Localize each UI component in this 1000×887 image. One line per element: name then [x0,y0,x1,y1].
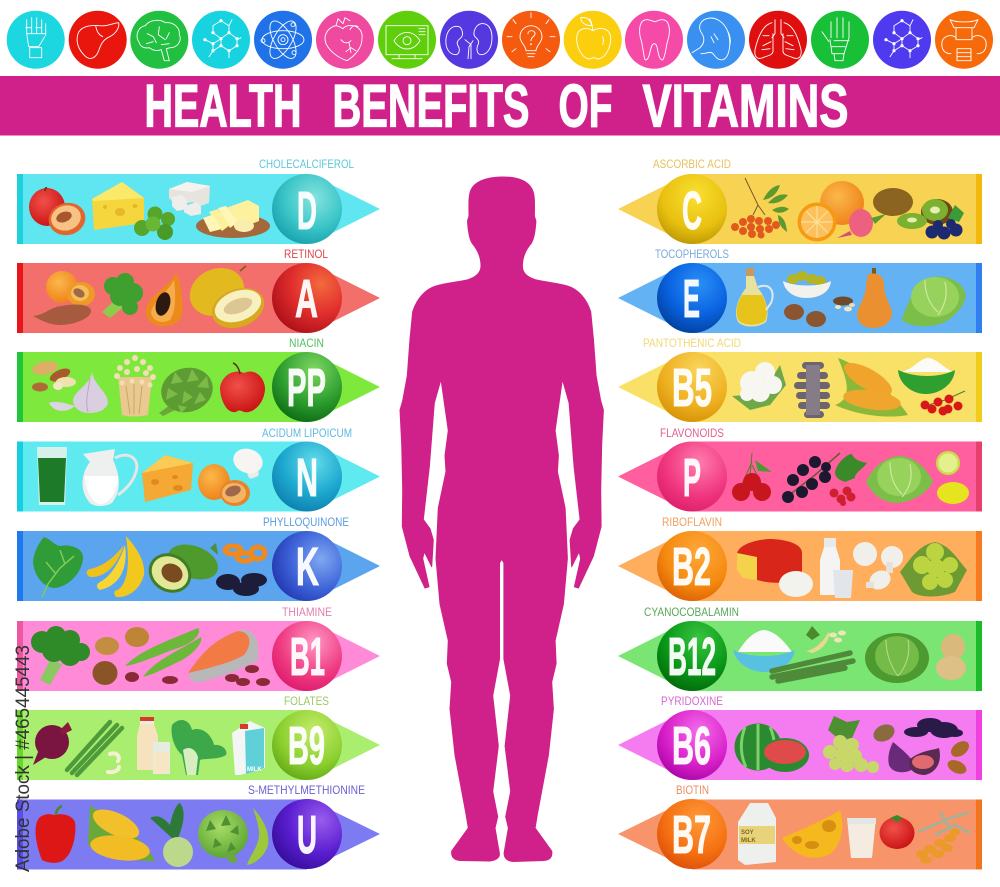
food: green grapes [823,716,879,773]
title: OF [558,72,612,140]
vitamin ball D: D [297,181,317,241]
food: romanesco [900,542,967,596]
food: figs [888,742,940,775]
food: cheese slice [782,810,842,858]
food: melon [182,259,270,335]
food: tomato [880,815,914,849]
title: BENEFITS [332,72,530,140]
panel: vitamin P [618,426,982,512]
ribbon arrow [17,800,380,870]
food: walnuts [92,627,149,685]
food: soy milk carton: SOY [741,830,754,836]
food: oyster mushroom stack [794,362,830,418]
vitamin ball B7 [657,799,727,869]
vitamin ball C [657,174,727,244]
vitamin ball K: K [296,537,319,597]
label: BIOTIN [676,783,709,797]
vitamin ball B7: B7 [672,805,711,865]
title banner [0,72,1000,140]
food: cashews [108,753,119,772]
panel: vitamin K [17,515,380,601]
vitamin ball U [272,799,342,869]
food: flour in green bowl [898,358,955,394]
food: savoy cabbage [865,633,929,683]
ribbon arrow [17,621,380,691]
icon: light bulb with question [502,11,560,69]
food: brussels sprouts [134,206,175,240]
food: butternut squash [857,268,892,328]
food: egg [779,571,813,597]
icon: atom [254,11,312,69]
food: bowl of olives [783,271,831,298]
label: CHOLECALCIFEROL [259,157,354,171]
ribbon arrow [17,174,380,244]
panel: vitamin C [618,157,982,244]
label: RETINOL [284,247,328,261]
food: watermelon [734,724,809,772]
label: RIBOFLAVIN [662,515,722,529]
icon: kidneys [440,11,498,69]
food: beans with leaf [806,626,846,653]
vitamin ball B9: B9 [288,716,325,776]
title: HEALTH [144,72,302,140]
icon: hand skeleton [811,11,869,69]
vitamin ball C: C [682,181,702,241]
food: milk bottle and glass [820,538,853,598]
vitamin ball D [272,174,342,244]
food: asparagus [772,653,853,681]
label: FLAVONOIDS [660,426,724,440]
vitamin ball PP [272,352,342,422]
food: glass of green juice [37,447,67,505]
food: brown nut [871,721,897,745]
food: radish [837,209,886,238]
food: leaves [835,454,867,482]
food: bok choy [171,720,226,775]
food: rowan berries [731,178,789,238]
icon: molecule [192,11,250,69]
label: ACIDUM LIPOICUM [262,426,352,440]
food: cauliflower [732,362,786,410]
ribbon arrow [618,621,982,691]
label: PYRIDOXINE [661,694,723,708]
food: butter on plate [196,200,270,238]
vitamin ball B1 [272,621,342,691]
food: soy milk carton: MILK [741,838,756,844]
food: asparagus [67,722,122,775]
food: prunes [216,573,267,596]
food: cottage cheese in bowl [733,630,795,672]
vitamin ball K [272,531,342,601]
vitamin ball A: A [295,269,318,329]
human silhouette [400,177,603,862]
food: cheese wheel [737,539,802,583]
vitamin ball B12: B12 [668,627,716,687]
food: artichoke [156,362,218,418]
food: apricots [198,464,250,506]
icon: eye scan monitor [378,11,436,69]
food: glass of milk [847,818,876,858]
panel: vitamin A [17,247,380,335]
icon: foot bones [7,11,65,69]
ribbon arrow [618,263,982,333]
ribbon arrow [17,352,380,422]
food: apricot [46,271,95,306]
icon: tooth [625,11,683,69]
food: dried apricots [225,546,265,561]
icon row [7,11,993,69]
title [144,72,848,140]
food: red currants [920,391,965,416]
ribbon arrow [17,710,380,780]
food: broccoli [31,626,90,685]
food: green pods [125,628,201,677]
ribbon arrow [17,442,380,512]
food: soybean pod [247,808,268,865]
panel: vitamin D [17,157,380,244]
panel: vitamin N [17,426,380,512]
food: soy milk carton [738,803,776,865]
ribbon arrow [618,531,982,601]
icon: lungs [749,11,807,69]
label: FOLATES [284,694,329,708]
food: tofu blocks [169,182,210,216]
icon: spleen [687,11,745,69]
panel: vitamin B7 [618,783,982,870]
panel: vitamin B2 [618,515,982,601]
ribbon arrow [618,800,982,870]
food: papaya [146,273,183,326]
vitamin ball N [272,442,342,512]
food: red apple [220,363,265,412]
food: corn cobs [88,803,155,864]
vitamin ball PP: PP [287,358,326,418]
label: S-METHYLMETHIONINE [248,783,365,797]
ribbon arrow [17,263,380,333]
vitamin ball B6 [657,710,727,780]
food: sweet potato [33,305,91,325]
panel: vitamin E [618,247,982,333]
vitamin ball B5: B5 [672,358,712,418]
food: mushroom [230,445,266,479]
icon: liver [69,11,127,69]
ribbon arrow [618,352,982,422]
label: PANTOTHENIC ACID [643,336,741,350]
ribbon arrow [618,442,982,512]
label: CYANOCOBALAMIN [644,605,739,619]
food: red berries [830,486,856,506]
food: nuts [784,296,855,327]
icon: heart [316,11,374,69]
food: apple and peach [29,188,89,239]
label: NIACIN [289,336,324,350]
food: lemon [937,482,969,504]
vitamin ball N: N [296,448,318,508]
panel: vitamin B6 [618,694,982,780]
food: bananas [87,536,144,597]
icon: apple [564,11,622,69]
food: pecans [945,738,972,777]
food: garlic [49,372,108,413]
panel: vitamin B9 [17,694,380,780]
title: VITAMINS [642,72,848,140]
panel: vitamin PP [17,336,380,422]
food: milk carton [232,721,265,775]
food: salmon steak [188,630,258,683]
food: broccoli [102,273,143,318]
ribbon arrow [618,710,982,780]
food: kiwi [873,188,953,229]
food: kohlrabi [150,803,193,867]
vitamin ball B9 [272,710,342,780]
vitamin ball B6: B6 [672,716,711,776]
vitamin ball U: U [297,805,317,865]
food: cheese wedge [142,455,193,502]
food: beet [33,722,72,765]
stock id watermark: Adobe Stock | #465445443 [13,645,34,872]
food: olive oil bottle [736,268,773,326]
vitamin ball A [272,263,342,333]
food: milk carton: MILK [247,767,262,773]
food: sea buckthorn [916,812,970,864]
food: mushrooms [853,542,903,593]
icon: molecule (violet) [873,11,931,69]
vitamin ball B2: B2 [672,537,711,597]
panel: vitamin B12 [618,605,982,691]
food: milk bottle and glass [137,717,170,774]
food: bell pepper [36,806,75,863]
vitamin ball E: E [683,269,700,329]
label: PHYLLOQUINONE [263,515,349,529]
label: ASCORBIC ACID [653,157,731,171]
panel: vitamin B5 [618,336,982,422]
vitamin ball B5 [657,352,727,422]
vitamin ball E [657,263,727,333]
icon: brain [130,11,188,69]
food: enoki mushrooms [114,355,156,416]
food: spinach [33,537,83,597]
food: peanuts and almonds [31,359,76,392]
ribbon arrow [17,531,380,601]
food: potatoes [936,634,966,680]
food: black currants [782,453,840,503]
food: artichoke [198,810,248,864]
food: avocado [141,538,223,600]
panel: vitamin B1 [17,605,380,691]
ribbon arrow [618,174,982,244]
food: cheese [92,182,144,230]
food: raisins [904,718,963,738]
panel: vitamin U [17,783,380,870]
food: lime [936,451,960,475]
food: cherries [732,453,772,501]
vitamin ball B1: B1 [290,627,325,687]
food: kidney beans [125,665,270,686]
icon: thyroid [935,11,993,69]
vitamin ball P: P [683,448,701,508]
vitamin ball B2 [657,531,727,601]
food: cabbage [866,456,933,503]
food: cabbage [902,277,966,326]
vitamin ball P [657,442,727,512]
food: orange [798,181,864,242]
food: milk jug [82,449,137,506]
food: corn [835,357,908,417]
vitamin ball B12 [657,621,727,691]
label: THIAMINE [282,605,332,619]
label: TOCOPHEROLS [655,247,729,261]
food: blueberries [926,205,964,240]
